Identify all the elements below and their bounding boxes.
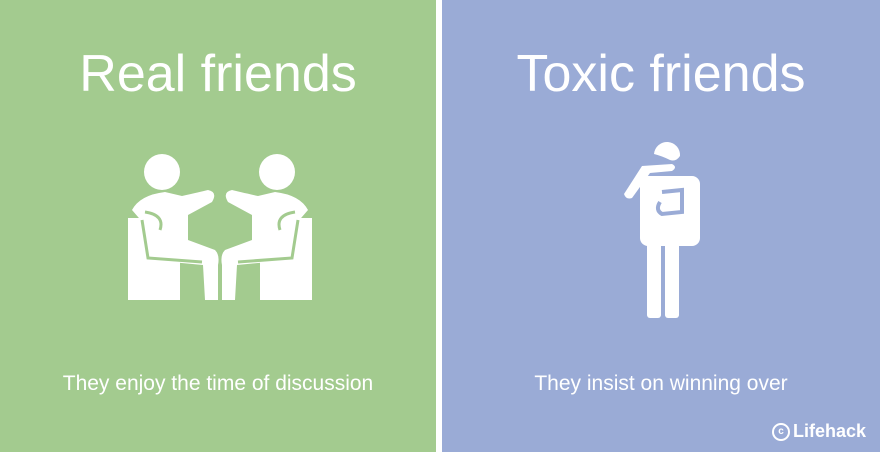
heading: Real friends: Real friends [79,45,357,103]
panel: toxic friends [442,0,880,452]
logo: Lifehack: c [778,426,784,436]
logo: Lifehack: Lifehack [793,421,866,441]
caption: They insist on winning over [534,372,788,395]
caption: They enjoy the time of discussion [63,372,373,395]
icon: two people talking [128,154,312,300]
panel: real friends [0,0,436,452]
heading: Toxic friends: Toxic friends [516,45,806,103]
icon: person turned away [624,142,700,318]
